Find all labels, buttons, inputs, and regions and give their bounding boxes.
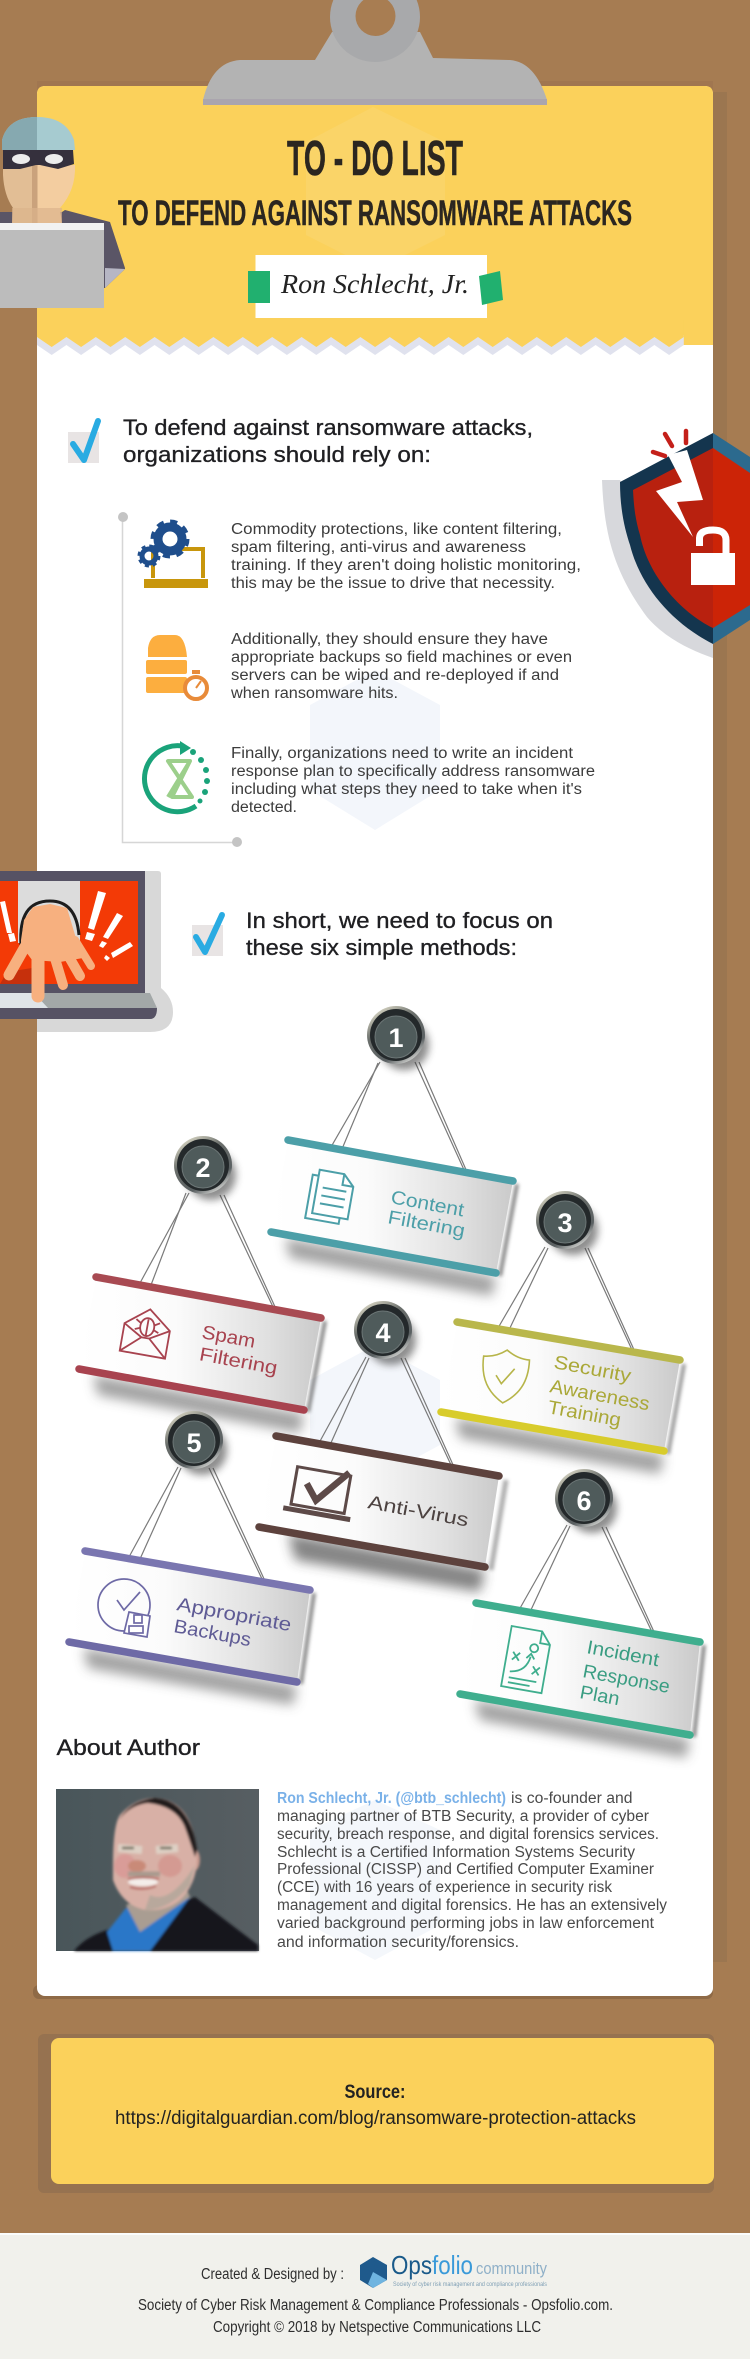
text: author bio: is co-founder and <box>511 1790 632 1807</box>
pin 6: 6 <box>576 1486 592 1516</box>
sign 6: incident response plan: Response <box>581 1661 671 1698</box>
sign 2: spam filtering: Filtering <box>198 1344 279 1379</box>
sign 3: security awareness training: Security <box>552 1352 633 1387</box>
panel: source: https://digitalguardian.com/blog/ransomware-protection-attacks <box>115 2108 636 2129</box>
timeline bracket <box>118 512 242 847</box>
text: commodity protections: this may be the issue to drive that necessity. <box>231 575 555 592</box>
heading: six methods: these six simple methods: <box>246 935 517 960</box>
sign 1: content filtering <box>271 1062 517 1296</box>
text: incident response: including what steps they need to take when it's <box>231 781 582 798</box>
sign 5: appropriate backups: Appropriate <box>175 1594 293 1636</box>
text: incident response: detected. <box>231 799 297 816</box>
pin 5: 5 <box>186 1428 202 1458</box>
icon: server and stopwatch <box>146 635 207 699</box>
text: commodity protections: training. If they aren't doing holistic monitoring, <box>231 557 581 574</box>
sign 2: spam filtering: Spam <box>200 1322 257 1353</box>
text: commodity protections <box>231 521 581 592</box>
text: author bio: management and digital forensics. He has an extensively <box>277 1897 667 1914</box>
checkbox icon 2 <box>192 915 223 956</box>
text: backups: Additionally, they should ensure they have <box>231 631 548 648</box>
heading: six methods: In short, we need to focus on <box>246 908 553 933</box>
logo: opsfolio community <box>360 2250 547 2288</box>
pin 1 <box>367 1006 429 1070</box>
pin 2 <box>174 1136 236 1200</box>
pin 4: 4 <box>375 1318 391 1348</box>
checkbox icon 1 <box>68 421 99 463</box>
icon: laptop with hand <box>0 871 173 1032</box>
text: author bio: Professional (CISSP) and Certified Computer Examiner <box>277 1861 654 1878</box>
panel: source: Source: <box>344 2082 406 2103</box>
panel: footer: Created & Designed by : <box>201 2266 344 2283</box>
text: backups: when ransomware hits. <box>230 685 398 702</box>
panel: footer <box>0 2233 750 2359</box>
panel: yellow header <box>37 86 713 355</box>
text: author bio: managing partner of BTB Security, a provider of cyber <box>277 1808 649 1825</box>
sign 1: content filtering: Filtering <box>386 1207 467 1242</box>
text: incident response: Finally, organizations need to write an incident <box>231 745 574 762</box>
text: incident response: response plan to specifically address ransomware <box>231 763 595 780</box>
text: author bio: Schlecht is a Certified Information Systems Security <box>277 1844 635 1861</box>
heading: defend: To defend against ransomware attacks, <box>123 415 533 440</box>
pin 4 <box>354 1301 416 1365</box>
sign 5: appropriate backups: Backups <box>172 1616 253 1651</box>
text: commodity protections: Commodity protections, like content filtering, <box>231 521 562 538</box>
heading: about author: About Author <box>56 1735 200 1760</box>
pin 3 <box>536 1191 598 1255</box>
paper shadow <box>33 81 727 1999</box>
text: author bio: and information security/forensics. <box>277 1934 519 1951</box>
author name card: Ron Schlecht, Jr. <box>280 269 469 299</box>
sign 5: appropriate backups <box>69 1467 314 1705</box>
icon: gears and laptop <box>139 522 208 588</box>
text: backups <box>230 631 572 702</box>
text: incident response <box>231 745 595 816</box>
panel: footer: Copyright © 2018 by Netspective Communications LLC <box>213 2319 541 2336</box>
panel: paper sheet <box>37 86 713 1996</box>
text: backups: appropriate backups so field machines or even <box>231 649 572 666</box>
sign 3: security awareness training: Awareness <box>548 1376 651 1415</box>
icon: clipboard clip <box>203 0 547 105</box>
text: backups: servers can be wiped and re-deployed if and <box>231 667 559 684</box>
logo: opsfolio community: community <box>476 2259 547 2278</box>
icon: broken shield <box>602 431 750 658</box>
sign 4: anti-virus <box>259 1357 506 1592</box>
sign 3: security awareness training <box>441 1247 684 1474</box>
text: commodity protections: spam filtering, anti-virus and awareness <box>231 539 526 556</box>
pin 3: 3 <box>557 1208 573 1238</box>
logo: opsfolio community: Society of cyber risk management and compliance professionals <box>393 2282 547 2288</box>
text: author bio: security, breach response, and digital forensics services. <box>277 1826 659 1843</box>
author photo <box>56 1789 259 1951</box>
watermark logos <box>310 670 440 1960</box>
logo: opsfolio community: Opsfolio <box>391 2250 473 2280</box>
author name card <box>248 255 503 318</box>
text: author bio <box>277 1790 667 1951</box>
icon: hacker with laptop <box>0 117 125 308</box>
pin 2: 2 <box>195 1153 211 1183</box>
sign 1: content filtering: Content <box>389 1187 466 1222</box>
sign 3: security awareness training: Training <box>546 1397 623 1431</box>
heading: six methods <box>246 908 553 960</box>
heading: defend: organizations should rely on: <box>123 442 431 467</box>
text: author bio: Ron Schlecht, Jr. (@btb_schlecht) <box>277 1790 506 1807</box>
sign 6: incident response plan: Plan <box>578 1682 621 1710</box>
pin 1: 1 <box>388 1023 404 1053</box>
title: TO - DO LIST <box>287 132 463 186</box>
panel: footer: Society of Cyber Risk Management & Compliance Professionals - Opsfolio.com. <box>138 2297 613 2314</box>
pin 5 <box>165 1411 227 1475</box>
sign 4: anti-virus: Anti-Virus <box>366 1492 470 1532</box>
pin 6 <box>555 1469 617 1533</box>
sign 6: incident response plan <box>460 1525 704 1758</box>
panel: source <box>38 2034 714 2193</box>
text: author bio: (CCE) with 16 years of experience in security risk <box>277 1879 612 1896</box>
sign 2: spam filtering <box>79 1193 325 1433</box>
text: author bio: varied background performing jobs in law enforcement <box>277 1915 655 1932</box>
heading: defend <box>123 415 533 467</box>
icon: hourglass cycle <box>144 741 210 812</box>
sign 6: incident response plan: Incident <box>585 1637 661 1671</box>
